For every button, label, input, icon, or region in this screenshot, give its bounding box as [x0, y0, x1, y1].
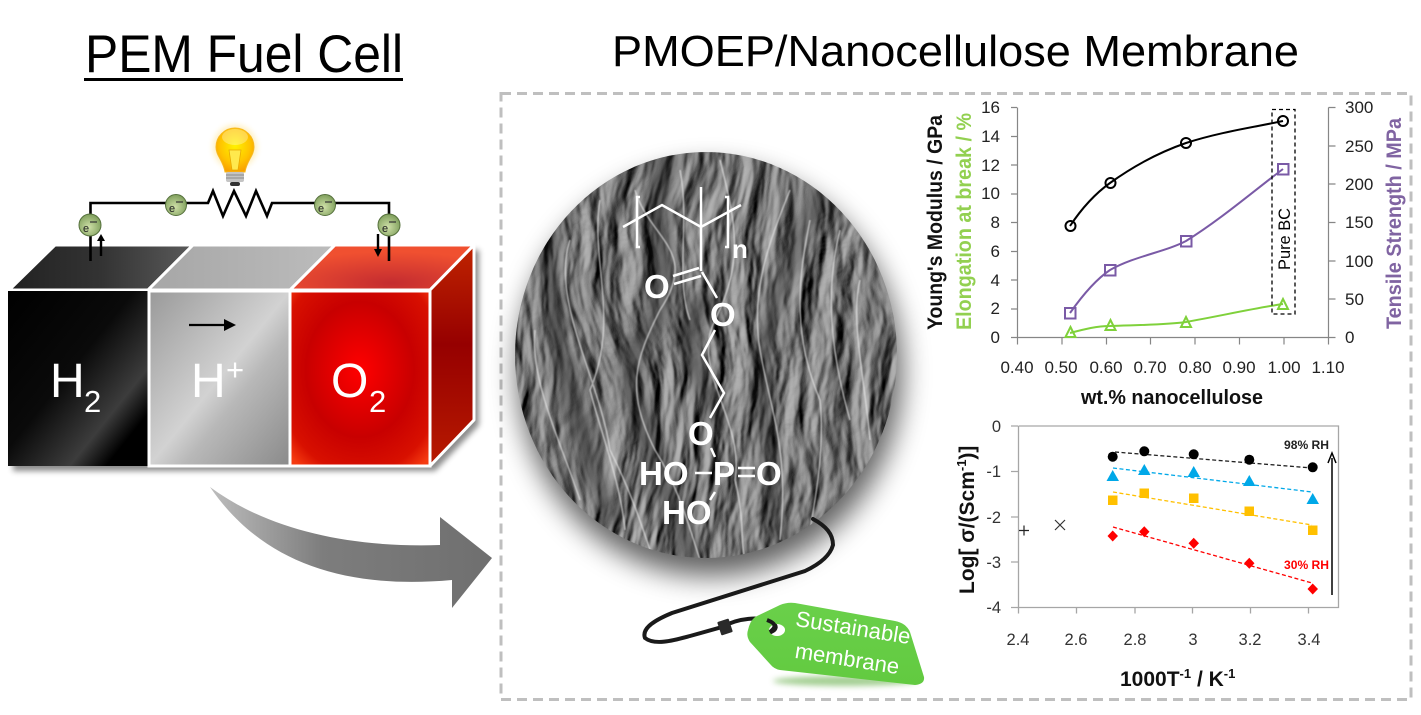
title: PEM Fuel Cell: PEM Fuel Cell: [85, 25, 403, 84]
left tick labels: 6: [991, 242, 1000, 261]
left tick labels: 12: [981, 156, 1000, 175]
series: blue: [1106, 464, 1319, 504]
x tick labels: [1007, 631, 1320, 649]
y axis title: )]: [956, 446, 979, 460]
stray cross marker: [1055, 520, 1065, 530]
x tick labels: 0.80: [1178, 358, 1212, 377]
electron flow arrow up: [97, 234, 105, 256]
tag text: Sustainable: [794, 606, 912, 649]
chart: mechanical properties: [924, 98, 1406, 409]
cord clip: [717, 618, 733, 636]
title: PMOEP/Nanocellulose Membrane: PMOEP/Nanocellulose Membrane: [612, 27, 1299, 76]
external circuit with resistor: [79, 191, 400, 261]
icon: light bulb: [213, 125, 257, 186]
membrane face: H+: H: [191, 355, 226, 408]
x tick labels: 2.8: [1124, 631, 1146, 649]
arrow: increasing humidity: [1328, 453, 1336, 595]
stray plus marker: [1019, 526, 1029, 536]
callout: Pure BC: Pure BC: [1275, 208, 1294, 270]
left tick labels: 14: [981, 127, 1000, 146]
chemical structure: PMOEP: [623, 187, 782, 531]
anode face: H2: 2: [84, 384, 101, 419]
electron flow arrow down: [374, 234, 382, 257]
chemical structure: PMOEP: P: [713, 455, 735, 492]
dark fibre bands: [550, 150, 820, 560]
callout: Pure BC: [1272, 110, 1295, 314]
membrane disc shadow: [518, 168, 902, 576]
chemical structure: PMOEP: HO: [639, 455, 688, 492]
x axis title: wt.% nanocellulose: [1080, 387, 1263, 409]
y tick labels: -3: [986, 554, 1001, 572]
right tick labels: 0: [1345, 328, 1354, 347]
anode face: H2: H: [50, 355, 85, 408]
x tick labels: 2.6: [1065, 631, 1087, 649]
chemical structure: PMOEP: O: [688, 415, 714, 452]
fuel cell cube: [8, 245, 474, 466]
x tick labels: 0.60: [1089, 358, 1123, 377]
chart: proton conductivity: [954, 418, 1338, 691]
cathode face: O2: O: [331, 355, 368, 408]
x tick labels: 2.4: [1007, 631, 1029, 649]
y tick labels: 0: [992, 418, 1001, 436]
cell top faces: [9, 245, 474, 466]
cathode face: O2: [290, 291, 430, 466]
x axis title: -1: [1224, 666, 1235, 681]
x tick labels: 0.50: [1044, 358, 1078, 377]
x tick labels: 0.40: [1000, 358, 1034, 377]
series: tensile strength: [1065, 164, 1288, 318]
series: elongation at break: [1066, 299, 1288, 337]
left tick labels: 0: [991, 328, 1000, 347]
x tick labels: 3.2: [1239, 631, 1261, 649]
axes: [1011, 426, 1338, 614]
tag shadow: [773, 676, 917, 686]
y axis title: Tensile Strength: Tensile Strength / MPa: [1383, 118, 1406, 329]
y axis title: Elongation at break: Elongation at break / %: [953, 113, 976, 330]
right tick labels: 150: [1345, 213, 1373, 232]
electrons: e: [382, 223, 388, 235]
x axis title: / K: [1191, 668, 1224, 691]
membrane face: H+: [149, 291, 290, 466]
electrons: e: [83, 223, 89, 235]
membrane face: H+: +: [226, 352, 244, 387]
right tick labels: 100: [1345, 252, 1373, 271]
cord: [644, 519, 833, 642]
right tick labels: 250: [1345, 137, 1373, 156]
series: 98% RH: [1108, 446, 1318, 472]
electrons: e: [169, 203, 175, 215]
chemical structure: PMOEP: O: [756, 455, 782, 492]
electrons: e: [318, 203, 324, 215]
left tick labels: 2: [991, 299, 1000, 318]
y tick labels: [986, 418, 1001, 617]
tag body: [747, 603, 924, 685]
y axis title: Log[ σ/(Scm: [956, 471, 979, 594]
series: 30% RH: [1108, 526, 1318, 594]
dashed panel: membrane: [501, 94, 1411, 700]
left tick labels: 10: [981, 184, 1000, 203]
left tick labels: 4: [991, 271, 1000, 290]
label: 98% RH: 98% RH: [1284, 438, 1329, 452]
anode face: H2: [8, 291, 148, 466]
left tick labels: [981, 98, 1000, 347]
sustainable membrane tag: [644, 519, 924, 686]
curved arrow: fuel cell to membrane: [210, 487, 492, 608]
x axis title: 1000T: [1120, 668, 1180, 691]
x axis title: -1: [1180, 666, 1191, 681]
chemical structure: PMOEP: O: [644, 268, 670, 305]
right tick labels: 50: [1345, 290, 1364, 309]
axes: [1011, 108, 1336, 344]
x tick labels: [1000, 358, 1345, 377]
x tick labels: 0.90: [1222, 358, 1256, 377]
label: 30% RH: 30% RH: [1284, 558, 1329, 572]
x tick labels: 1.00: [1267, 358, 1301, 377]
right tick labels: 300: [1345, 98, 1373, 117]
x tick labels: 3.4: [1298, 631, 1320, 649]
light fibre ridges: [534, 160, 870, 560]
chemical structure: PMOEP: n: [732, 234, 748, 264]
series: yellow: [1108, 488, 1318, 535]
series: Young's modulus: [1066, 116, 1288, 231]
left tick labels: 8: [991, 213, 1000, 232]
sustainable membrane tag: membrane: [793, 638, 901, 679]
x tick labels: 1.10: [1311, 358, 1345, 377]
y tick labels: -2: [986, 509, 1001, 527]
x tick labels: 3: [1188, 631, 1198, 649]
y tick labels: -1: [986, 463, 1001, 481]
cathode face: O2: 2: [369, 384, 386, 419]
x tick labels: 0.70: [1133, 358, 1167, 377]
SEM micrograph disc: [515, 152, 897, 558]
chemical structure: PMOEP: O: [710, 296, 736, 333]
electrons: [79, 194, 400, 236]
y tick labels: -4: [986, 599, 1001, 617]
left tick labels: 16: [981, 98, 1000, 117]
y axis title: Young's Modulus: Young's Modulus / GPa: [924, 115, 947, 330]
right tick labels: 200: [1345, 175, 1373, 194]
y axis title: -1: [954, 460, 969, 471]
chemical structure: PMOEP: HO: [662, 494, 712, 531]
right tick labels: [1345, 98, 1373, 347]
